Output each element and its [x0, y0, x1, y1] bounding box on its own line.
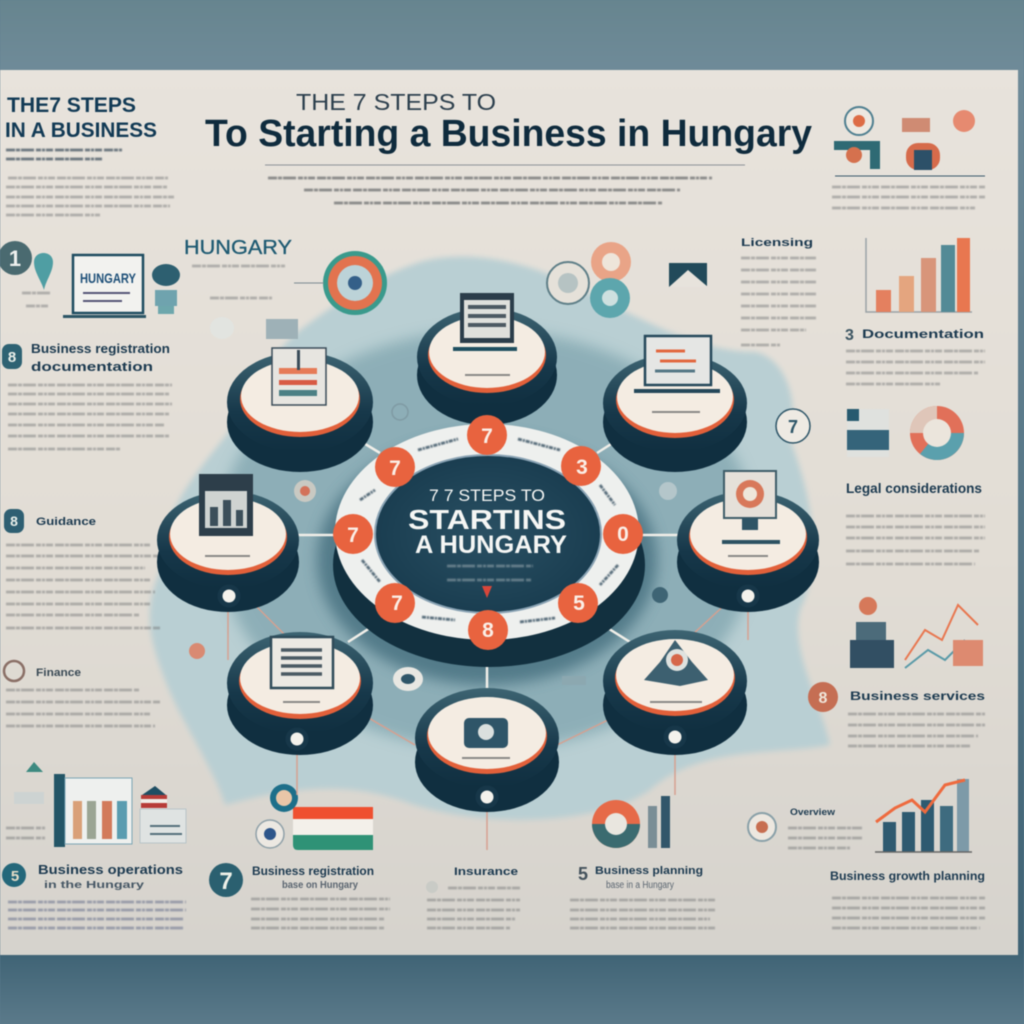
- step 4: Finance: [36, 667, 81, 679]
- badge numbers: 5: [573, 592, 585, 615]
- step platform: middle right: [677, 471, 819, 612]
- right panel: building icons: [834, 107, 985, 176]
- central hub: [333, 424, 645, 667]
- badge numbers: 7: [347, 524, 359, 547]
- step 3 text: [845, 327, 985, 384]
- step 7: text: Business registration: [252, 864, 374, 878]
- Hungarian flag: [256, 784, 373, 850]
- step 7: text: 7: [219, 868, 233, 895]
- chart icons and badge: [776, 406, 964, 460]
- step 2: [2, 341, 172, 449]
- step: bottom-right line chart: [875, 779, 972, 852]
- connector lines: [298, 405, 678, 690]
- right panel: bar chart: [866, 238, 972, 312]
- step 7: text: [209, 863, 390, 928]
- hungary label: [184, 237, 298, 339]
- badge numbers: 7: [389, 457, 401, 480]
- step 8 text: 8: [819, 690, 828, 707]
- small medallions: [294, 251, 387, 315]
- step 1: website icon: 1: [9, 246, 21, 271]
- cluster icons top right: [547, 242, 708, 318]
- step 3: [4, 509, 160, 628]
- intro paragraph: [268, 178, 712, 203]
- step 3 text: 3: [845, 327, 854, 344]
- top-left heading: IN A BUSINESS: [5, 119, 157, 142]
- upper-right text: [741, 237, 816, 345]
- title: THE 7 STEPS TO: [296, 89, 496, 115]
- step 3: 8: [10, 513, 18, 529]
- upper-right text: Licensing: [741, 237, 813, 249]
- chart illustration: [6, 762, 186, 847]
- legal heading and text: Legal considerations: [846, 480, 982, 496]
- step platform: bottom: [415, 688, 559, 812]
- hungary label: HUNGARY: [184, 237, 292, 259]
- white node dots: [220, 587, 757, 806]
- step 4: [4, 661, 160, 726]
- hub title: 7 7 STEPS TO: [429, 486, 545, 505]
- step platform: lower left: [227, 632, 373, 755]
- badge numbers: 0: [617, 523, 629, 546]
- orange step badges: [333, 415, 643, 650]
- step 2: documentation: [31, 359, 153, 374]
- map of Hungary: [150, 257, 830, 820]
- top-left heading: THE7 STEPS: [7, 94, 136, 117]
- step 1: website icon: HUNGARY: [80, 270, 137, 286]
- right panel: intro text: [832, 187, 985, 208]
- bottom icons: [592, 796, 776, 848]
- bottom-right text: Overview: [790, 807, 836, 817]
- top-left heading: [5, 94, 174, 215]
- step 1: website icon: [0, 241, 180, 318]
- title: [205, 89, 812, 165]
- bottom-right text: [788, 807, 862, 848]
- step 6 text: [426, 866, 520, 928]
- step 5: Business operations: [38, 862, 183, 877]
- step 6 text: Insurance: [454, 866, 518, 878]
- legal heading and text: [846, 480, 985, 564]
- chart icons and badge: 7: [788, 417, 798, 437]
- step 7: text: base on Hungary: [282, 880, 358, 891]
- badge numbers: 3: [576, 456, 588, 479]
- badge numbers: [347, 425, 629, 642]
- step 2: 8: [8, 349, 16, 366]
- step 8 text: Business services: [850, 689, 985, 703]
- step 3 text: Documentation: [862, 327, 984, 341]
- step 5: 5: [11, 868, 19, 885]
- step platform: top: [417, 293, 557, 425]
- step 5: in the Hungary: [44, 880, 145, 891]
- badge numbers: 8: [482, 619, 494, 642]
- step 8 text: [808, 682, 985, 746]
- step platform: upper left: [227, 348, 373, 472]
- step platform: lower right: [603, 630, 747, 755]
- hub title: A HUNGARY: [415, 531, 567, 559]
- step 5 bottom centre: base in a Hungary: [606, 880, 674, 891]
- bottom-right text block: [830, 869, 985, 928]
- hub title: STARTINS: [408, 504, 566, 535]
- badge numbers: 7: [481, 425, 493, 448]
- step 5 bottom centre: 5: [578, 864, 588, 884]
- step 2: Business registration: [31, 341, 170, 356]
- title: To Starting a Business in Hungary: [205, 113, 812, 155]
- small floating map icons: [189, 404, 733, 691]
- badge numbers: 7: [391, 592, 403, 615]
- step 5 bottom centre: Business planning: [595, 865, 703, 877]
- step 5: [2, 862, 186, 928]
- building and trend icon: [850, 597, 983, 668]
- step platform: upper right: [603, 336, 747, 472]
- bottom-right text block: Business growth planning: [830, 869, 985, 883]
- step 5 bottom centre: [570, 864, 715, 928]
- step 3: Guidance: [36, 516, 96, 528]
- step platform: middle left: [157, 474, 299, 612]
- hub title: [408, 486, 567, 559]
- hub ring labels: [360, 439, 618, 622]
